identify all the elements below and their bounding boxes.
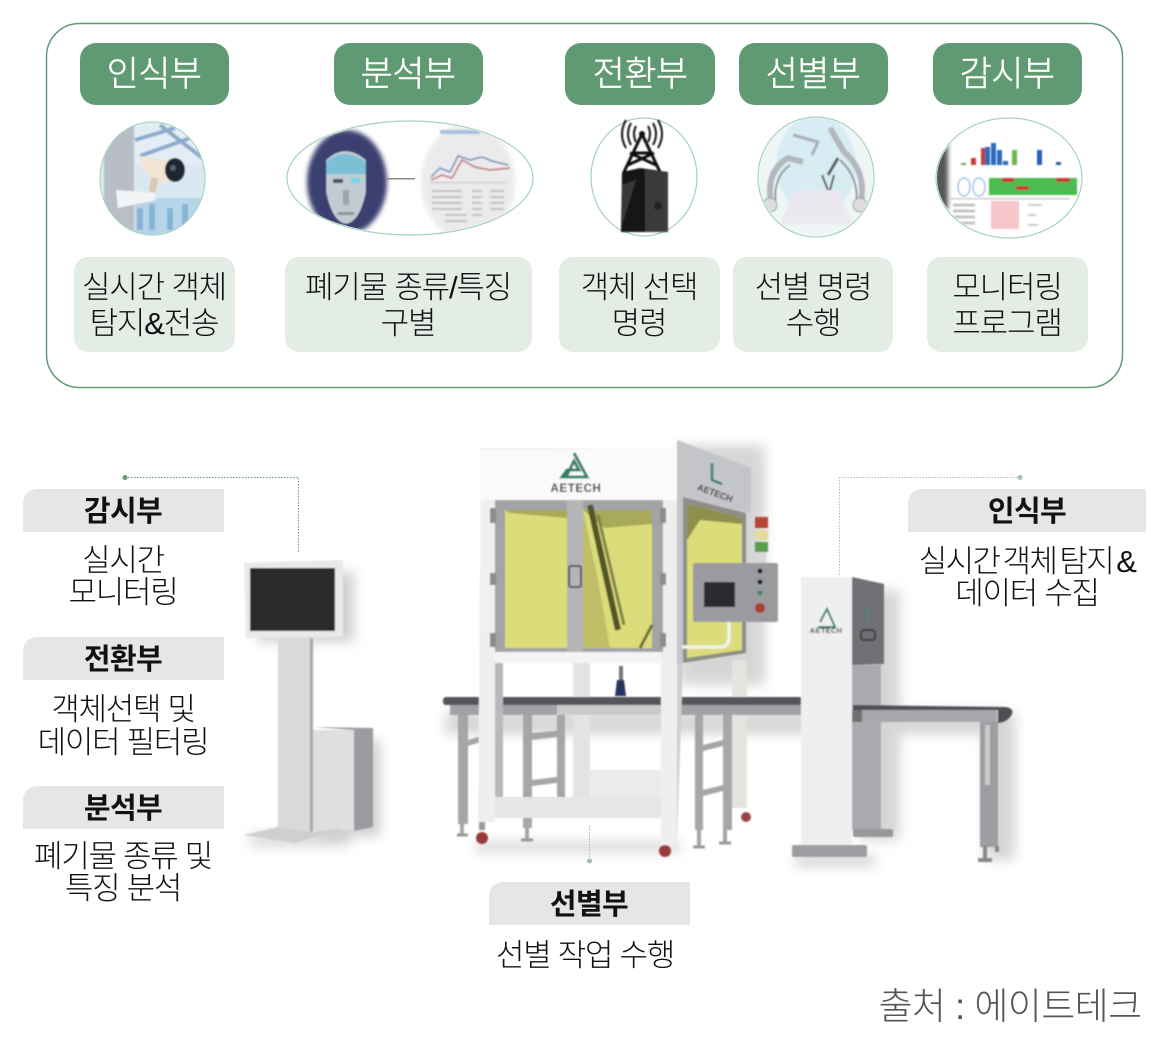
label: 선별부: 선별부 — [550, 888, 628, 921]
sensor tool — [615, 666, 626, 696]
column: 분석부: 구별 — [381, 306, 435, 341]
label: 전환부: 객체선택 및 — [51, 692, 195, 727]
label: 인식부: 인식부 — [988, 495, 1066, 528]
column: 분석부 — [285, 43, 533, 352]
label: 선별부 — [489, 882, 690, 973]
connector: 인식부 dotted leader — [840, 475, 1022, 575]
icon: security camera — [100, 122, 206, 236]
recognition unit — [792, 577, 893, 857]
conveyor: left section — [443, 697, 803, 830]
column: 선별부: 수행 — [786, 306, 840, 341]
column: 선별부 — [733, 43, 893, 352]
column: 감시부: 프로그램 — [952, 306, 1062, 341]
connector: 감시부 dotted leader — [122, 475, 298, 553]
label: 전환부: 전환부 — [84, 643, 162, 676]
label: 분석부: 분석부 — [84, 792, 162, 825]
icon: monitoring dashboard — [930, 118, 1082, 238]
column: 인식부 — [74, 43, 235, 352]
column: 분석부: 분석부 — [361, 55, 455, 94]
column: 전환부: 객체 선택 — [581, 270, 697, 305]
label: 분석부: 폐기물 종류 및 — [34, 839, 212, 874]
column: 전환부: 명령 — [612, 306, 666, 341]
label: 감시부: 실시간 — [82, 543, 165, 578]
icon: robot arms — [758, 115, 874, 237]
machine side panel — [677, 440, 751, 663]
column: 전환부: 전환부 — [593, 55, 687, 94]
column: 인식부: 인식부 — [107, 55, 201, 94]
signal tower lamp — [755, 517, 768, 563]
source credit: 출처 : 에이트테크 — [878, 986, 1142, 1027]
panel: system components — [46, 24, 1122, 388]
foot pads and casters — [457, 812, 751, 857]
column: 감시부 — [927, 43, 1088, 352]
label: 인식부: 실시간 객체 탐지 & — [919, 544, 1137, 579]
column: 인식부: 탐지&전송 — [90, 306, 218, 341]
illustration: monitoring kiosk — [244, 560, 380, 845]
label: 분석부 — [23, 786, 224, 906]
label: 분석부: 특징 분석 — [65, 871, 181, 906]
logo: side AETECH: AETECH — [696, 482, 734, 504]
label: 전환부: 데이터 필터링 — [38, 725, 208, 760]
icon: signal tower and server — [591, 118, 697, 236]
icon: AI face and data chart — [287, 121, 533, 240]
control panel — [693, 563, 778, 622]
label: 감시부: 모니터링 — [69, 575, 177, 610]
column: 선별부: 선별부 — [766, 55, 860, 94]
white cable — [682, 622, 729, 647]
column: 분석부: 폐기물 종류/특징 — [305, 270, 511, 305]
label: 인식부: 데이터 수집 — [955, 576, 1099, 611]
back post and inner frame — [732, 660, 747, 808]
logo: side AETECH — [696, 463, 734, 504]
label: 감시부: 감시부 — [84, 495, 162, 528]
column: 선별부: 선별 명령 — [755, 270, 871, 305]
label: 인식부 — [908, 489, 1146, 611]
column: 전환부 — [559, 43, 720, 352]
illustration: sorting machine with conveyor — [443, 440, 1015, 867]
label: 선별부: 선별 작업 수행 — [496, 938, 674, 973]
door frame and yellow panes — [495, 500, 663, 652]
recognition unit: AETECH — [810, 626, 842, 635]
label: 전환부 — [23, 637, 224, 760]
connector: 선별부 dotted leader — [587, 826, 592, 864]
label: 감시부 — [23, 489, 224, 610]
column: 인식부: 실시간 객체 — [82, 270, 226, 305]
logo: front AETECH: AETECH — [551, 483, 601, 495]
column: 감시부: 모니터링 — [952, 270, 1062, 305]
column: 감시부: 감시부 — [960, 55, 1054, 94]
conveyor: right section — [852, 705, 1012, 860]
machine front frame — [478, 448, 677, 845]
logo: front AETECH — [551, 453, 601, 495]
